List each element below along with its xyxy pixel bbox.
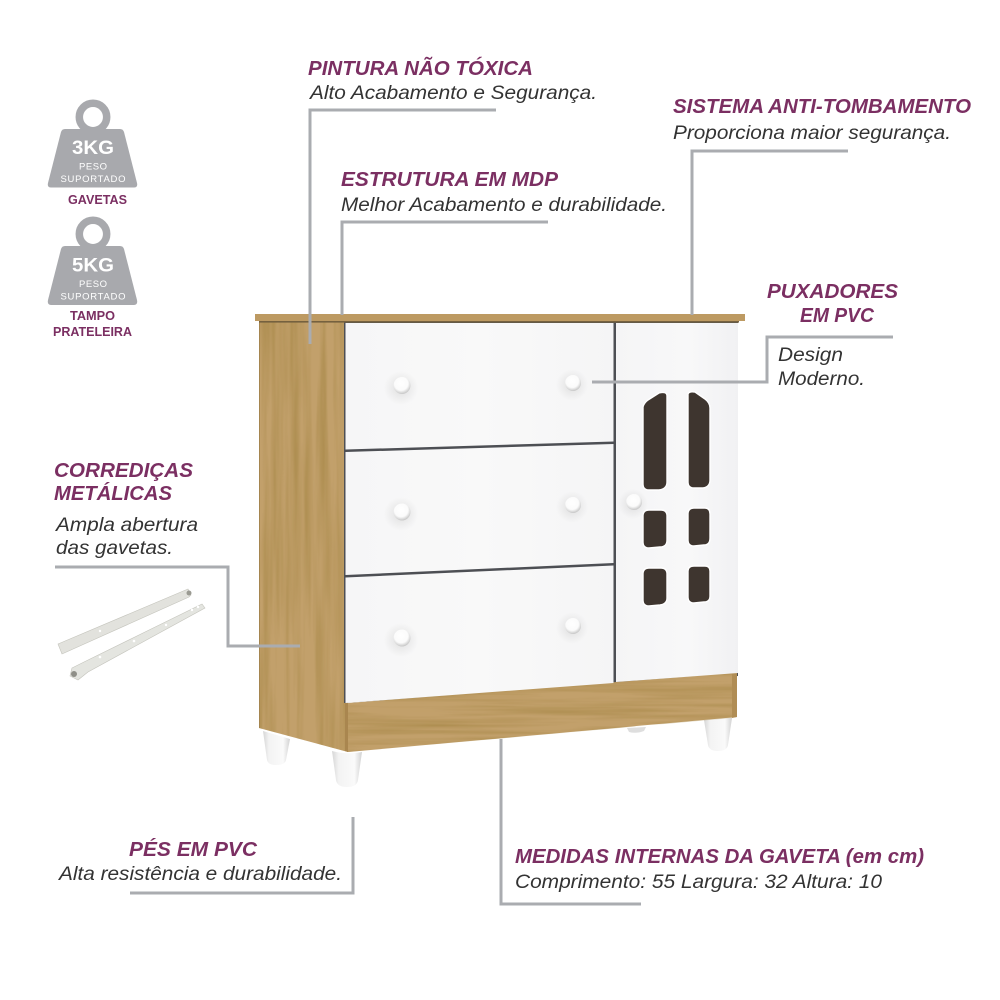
callout: corrediças metálicas: [54, 460, 300, 646]
callout: pintura não tóxica: [308, 56, 597, 344]
callout: estrutura em MDP: ESTRUTURA EM MDP: [341, 169, 559, 191]
base panel wood: [345, 672, 737, 754]
callout: estrutura em MDP: Melhor Acabamento e durabilidade.: [341, 195, 667, 216]
callout: puxadores em PVC: PUXADORES: [767, 281, 899, 303]
weight icon: 5KG shelf top: 5KG: [72, 256, 114, 276]
feet: [263, 718, 732, 787]
callout: puxadores em PVC: Design: [778, 345, 843, 366]
callout: sistema anti-tombamento: Proporciona maior segurança.: [673, 123, 951, 144]
callout: pés em PVC: Alta resistência e durabilidade.: [58, 864, 342, 885]
callout: puxadores em PVC: EM PVC: [800, 305, 875, 327]
door: [616, 323, 738, 682]
callout: corrediças metálicas: das gavetas.: [56, 538, 173, 559]
weight icon: 5KG shelf top: SUPORTADO: [60, 292, 126, 302]
callout: estrutura em MDP: [341, 169, 667, 315]
callout: sistema anti-tombamento: SISTEMA ANTI-TOMBAMENTO: [673, 96, 971, 118]
callout: medidas internas: MEDIDAS INTERNAS DA GAVETA (em cm): [515, 846, 924, 868]
dresser furniture: [255, 314, 745, 787]
callout: corrediças metálicas: METÁLICAS: [54, 482, 173, 505]
callout: corrediças metálicas: CORREDIÇAS: [54, 460, 194, 482]
callout: pintura não tóxica: Alto Acabamento e Segurança.: [309, 83, 597, 104]
callout: pés em PVC: PÉS EM PVC: [129, 838, 258, 861]
caption: tampo prateleira: TAMPO: [70, 308, 115, 323]
weight icon: 3KG drawers: 3KG: [72, 138, 114, 159]
weight icon: 3KG drawers: [48, 103, 137, 188]
weight icon: 5KG shelf top: [48, 220, 137, 305]
dark gap behind the fronts: [344, 322, 738, 703]
drawer and door knobs: [384, 369, 648, 657]
drawer 1: [346, 323, 614, 450]
weight icon: 3KG drawers: SUPORTADO: [60, 174, 126, 185]
caption: gavetas: GAVETAS: [68, 192, 127, 207]
weight icon: 5KG shelf top: PESO: [79, 279, 107, 290]
callout: pés em PVC: [58, 817, 353, 893]
top board: [255, 314, 745, 323]
callout: puxadores em PVC: [592, 281, 899, 390]
caption: tampo prateleira: PRATELEIRA: [53, 324, 133, 339]
callout: puxadores em PVC: Moderno.: [778, 369, 865, 390]
callout: corrediças metálicas: Ampla abertura: [55, 515, 198, 536]
icon: metal drawer slides: [58, 589, 205, 680]
callout: medidas internas: Comprimento: 55 Largura: 32 Altura: 10: [515, 872, 882, 893]
side panel wood: [259, 322, 349, 754]
door windows: [643, 392, 710, 606]
caption: tampo prateleira: [53, 308, 133, 339]
weight icon: 3KG drawers: PESO: [79, 162, 107, 172]
callout: sistema anti-tombamento: [673, 96, 971, 315]
callout: pintura não tóxica: PINTURA NÃO TÓXICA: [308, 56, 533, 80]
callout: medidas internas: [501, 739, 924, 904]
drawer 3: [346, 566, 614, 703]
drawer 2: [346, 444, 614, 575]
